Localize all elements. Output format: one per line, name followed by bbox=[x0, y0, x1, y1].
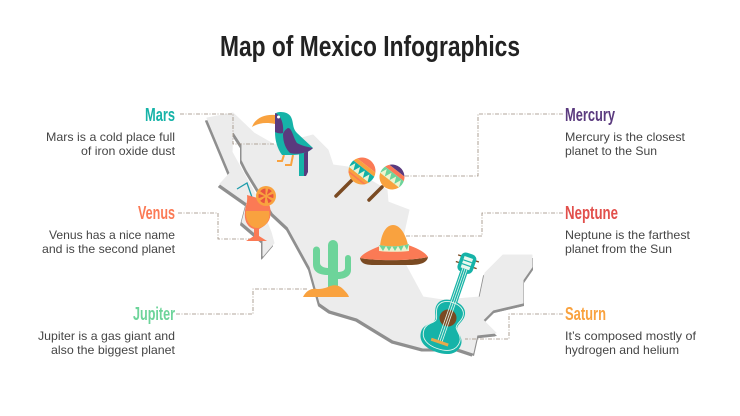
heading: Neptune: Neptune bbox=[565, 203, 618, 223]
connector: Saturn bbox=[465, 314, 563, 339]
heading: Jupiter: Jupiter bbox=[133, 304, 175, 324]
body: Mercury: planet to the Sun bbox=[565, 144, 657, 158]
heading: Mars: Mars bbox=[145, 105, 175, 125]
body: Jupiter bbox=[38, 329, 176, 357]
icon: guitar bbox=[416, 247, 490, 359]
heading: Saturn: Saturn bbox=[565, 304, 606, 324]
title: Map of Mexico Infographics bbox=[220, 31, 520, 63]
body: Mercury bbox=[565, 130, 686, 158]
connector: Neptune bbox=[406, 213, 563, 236]
body: Venus bbox=[42, 228, 176, 256]
body: Neptune bbox=[565, 228, 691, 256]
body: Jupiter: Jupiter is a gas giant and bbox=[38, 329, 175, 343]
text block: Neptune bbox=[565, 203, 691, 256]
text block: Venus bbox=[42, 203, 176, 256]
icon: maracas bbox=[334, 158, 404, 202]
body: Mercury: Mercury is the closest bbox=[565, 130, 686, 144]
body: Saturn: It’s composed mostly of bbox=[565, 329, 697, 343]
map of Mexico bbox=[206, 113, 533, 356]
icon: toucan bbox=[252, 112, 313, 176]
body: Neptune: Neptune is the farthest bbox=[565, 228, 691, 242]
text block: Saturn bbox=[565, 304, 697, 357]
body: Mars: Mars is a cold place full bbox=[46, 130, 175, 144]
heading: Venus: Venus bbox=[138, 203, 175, 223]
text block: Jupiter bbox=[38, 304, 176, 357]
icon: sombrero bbox=[360, 225, 428, 265]
body: Jupiter: also the biggest planet bbox=[51, 343, 176, 357]
body: Mars: of iron oxide dust bbox=[81, 144, 176, 158]
connector: Mercury bbox=[405, 114, 563, 176]
connector: Jupiter bbox=[176, 289, 307, 314]
text block: Mars bbox=[46, 105, 176, 158]
body: Saturn: hydrogen and helium bbox=[565, 343, 679, 357]
body: Saturn bbox=[565, 329, 697, 357]
heading: Mercury: Mercury bbox=[565, 105, 615, 125]
text block: Mercury bbox=[565, 105, 686, 158]
body: Mars bbox=[46, 130, 176, 158]
body: Venus: and is the second planet bbox=[42, 242, 176, 256]
icon: cactus bbox=[303, 240, 351, 297]
body: Venus: Venus has a nice name bbox=[49, 228, 175, 242]
connector: Venus bbox=[178, 213, 250, 239]
connector: Mars bbox=[180, 114, 275, 144]
icon: cocktail bbox=[237, 183, 276, 241]
body: Neptune: planet from the Sun bbox=[565, 242, 672, 256]
